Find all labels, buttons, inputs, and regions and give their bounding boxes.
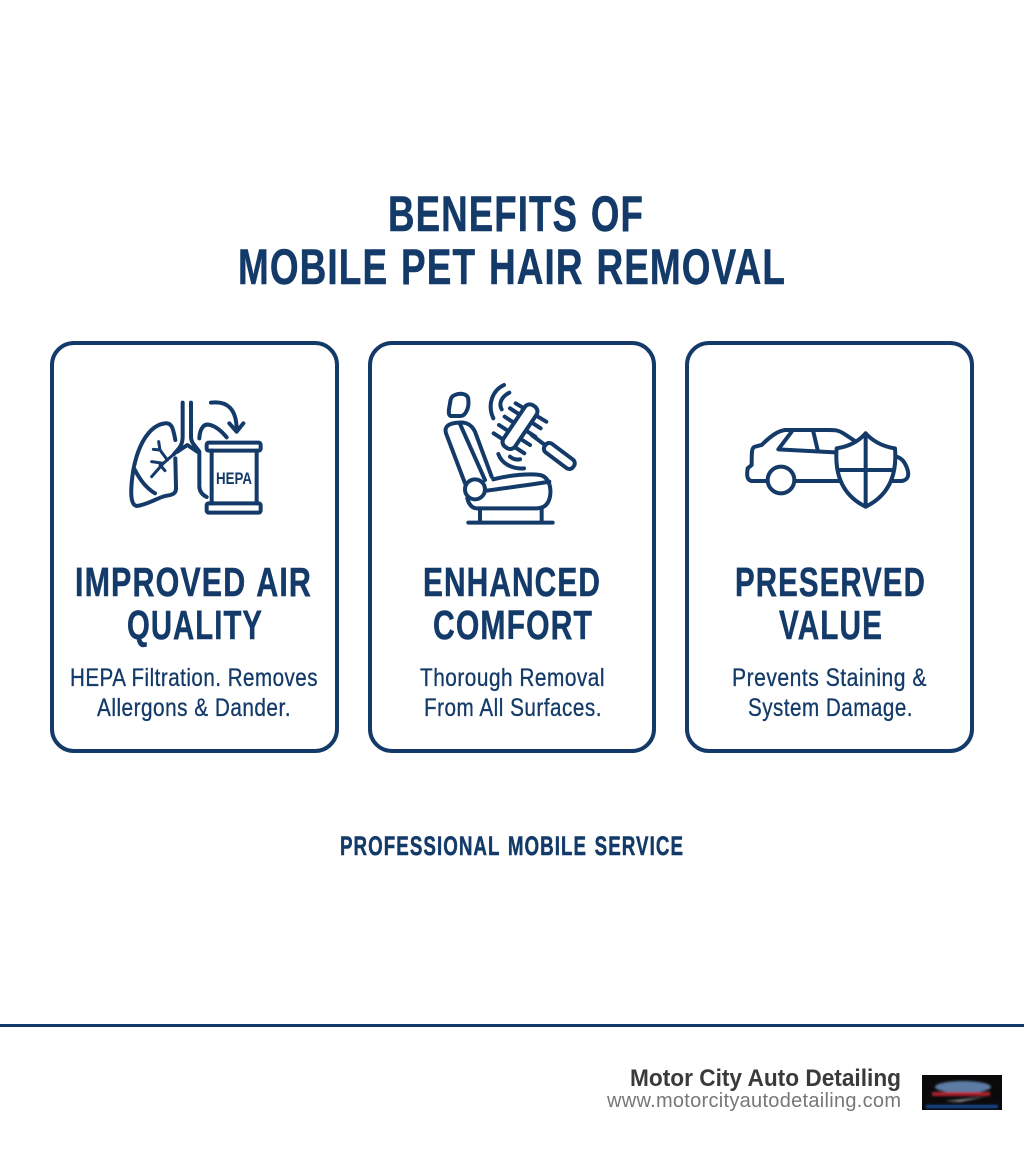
tagline: PROFESSIONAL MOBILE SERVICE <box>340 831 684 861</box>
icon: car seat and brush <box>446 385 577 523</box>
title: MOBILE PET HAIR REMOVAL <box>238 239 786 295</box>
title <box>238 186 786 295</box>
description: preserved value <box>732 664 927 722</box>
panel: preserved value <box>687 343 972 751</box>
panel: enhanced comfort <box>370 343 654 751</box>
icon label: HEPA: HEPA <box>216 469 252 488</box>
heading: preserved value: PRESERVED <box>735 559 926 605</box>
icon: lungs and HEPA filter <box>131 402 261 513</box>
description: preserved value: System Damage. <box>748 694 913 722</box>
panel: improved air quality <box>52 343 337 751</box>
heading: enhanced comfort: ENHANCED <box>423 559 601 605</box>
description: enhanced comfort: From All Surfaces. <box>424 694 602 722</box>
logo <box>922 1075 1002 1110</box>
footer divider <box>0 1024 1024 1027</box>
description: improved air quality: HEPA Filtration. Removes <box>70 664 318 692</box>
heading: preserved value <box>735 559 926 648</box>
heading: preserved value: VALUE <box>779 602 883 648</box>
footer brand name: Motor City Auto Detailing <box>630 1065 901 1092</box>
icon: car and shield <box>747 430 908 507</box>
description: improved air quality: Allergons & Dander. <box>97 694 291 722</box>
description: enhanced comfort <box>420 664 605 722</box>
description: preserved value: Prevents Staining & <box>732 664 927 692</box>
description: enhanced comfort: Thorough Removal <box>420 664 605 692</box>
heading: improved air quality: QUALITY <box>127 602 263 648</box>
footer website: www.motorcityautodetailing.com <box>606 1090 901 1112</box>
heading: improved air quality <box>75 559 312 648</box>
description: improved air quality <box>70 664 318 722</box>
heading: improved air quality: IMPROVED AIR <box>75 559 312 605</box>
title: BENEFITS OF <box>388 186 644 242</box>
heading: enhanced comfort <box>423 559 601 648</box>
heading: enhanced comfort: COMFORT <box>433 602 593 648</box>
